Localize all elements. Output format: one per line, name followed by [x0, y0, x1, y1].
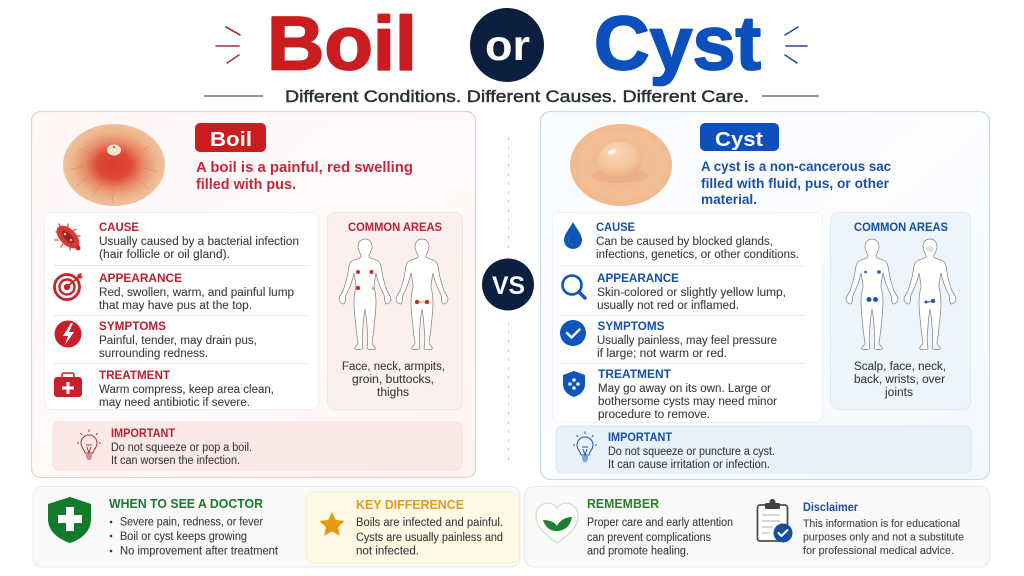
text: cause — [596, 236, 799, 261]
heading: remember: REMEMBER — [587, 497, 659, 511]
text: symptoms: if large; not warm or red. — [597, 348, 727, 360]
text: treatment: may need antibiotic if severe. — [99, 397, 250, 409]
caption: common areas — [342, 361, 445, 399]
text: treatment: May go away on its own. Large or — [598, 383, 771, 395]
bottom bar right — [524, 486, 990, 567]
cyst details card — [552, 212, 822, 422]
boil common areas panel — [328, 212, 462, 410]
cyst definition — [701, 159, 891, 207]
heading: cause: CAUSE — [99, 222, 139, 234]
text: remember: can prevent complications — [587, 532, 711, 544]
text: important — [111, 442, 252, 467]
icon: clipboard with check — [758, 499, 792, 542]
text: cause: infections, genetics, or other conditions. — [596, 249, 799, 261]
caption: common areas: thighs — [377, 387, 409, 399]
icon: target — [54, 273, 83, 300]
text: important: Do not squeeze or pop a boil. — [111, 442, 252, 454]
text: symptoms — [99, 335, 257, 360]
text: cause: Can be caused by blocked glands, — [596, 236, 773, 248]
list: when to see a doctor: No improvement after treatment — [120, 546, 279, 558]
text: treatment: bothersome cysts may need minor — [598, 396, 777, 408]
panel: cyst — [540, 112, 990, 480]
list: when to see a doctor: Boil or cyst keeps growing — [120, 531, 247, 543]
text: cause: Usually caused by a bacterial infection — [99, 236, 299, 248]
cyst common areas panel — [830, 212, 970, 410]
illustration: boil on skin — [63, 124, 165, 206]
text: remember: Proper care and early attention — [587, 517, 733, 529]
cyst label: Cyst — [715, 129, 763, 151]
text: important — [608, 446, 775, 471]
text: symptoms: Painful, tender, may drain pus, — [99, 335, 257, 347]
boil definition: filled with pus. — [196, 177, 296, 193]
icon: first aid kit — [54, 373, 82, 397]
icon: bacterium — [52, 221, 84, 253]
text: appearance: Skin-colored or slightly yellow lump, — [597, 287, 786, 299]
text: remember — [587, 517, 733, 558]
text: key difference: Cysts are usually painless and — [356, 532, 503, 544]
cyst definition: material. — [701, 192, 757, 207]
diagram: body back with boil spots — [396, 239, 448, 350]
boil important callout — [53, 422, 462, 470]
heading: important: IMPORTANT — [608, 432, 672, 444]
cyst label — [700, 123, 779, 151]
centre divider with VS badge: VS — [492, 272, 525, 300]
icon: check circle — [560, 320, 586, 346]
heading: treatment: TREATMENT — [99, 370, 170, 382]
caption: common areas — [854, 361, 946, 399]
subtitle: Different Conditions. Different Causes. Different Care. — [285, 87, 749, 106]
diagram: body front with cyst spots — [846, 239, 898, 350]
list: when to see a doctor: Severe pain, redness, or fever — [120, 516, 263, 528]
text: appearance — [597, 287, 786, 312]
rays left of title — [216, 27, 240, 63]
text: treatment — [99, 384, 274, 409]
cyst definition: A cyst is a non-cancerous sac — [701, 159, 891, 174]
text: symptoms: Usually painless, may feel pressure — [597, 335, 777, 347]
heading: cause: CAUSE — [596, 222, 635, 234]
text: important: It can cause irritation or infection. — [608, 459, 770, 471]
text: treatment: Warm compress, keep area clean, — [99, 384, 274, 396]
cyst definition: filled with fluid, pus, or other — [701, 176, 890, 191]
caption: common areas: back, wrists, over — [854, 374, 945, 386]
caption: common areas: Scalp, face, neck, — [854, 361, 946, 373]
title word: Boil: Boil — [267, 2, 417, 86]
icon: magnifying glass — [562, 276, 585, 298]
diagram: body back with cyst spots — [904, 239, 956, 350]
icon: star — [320, 512, 344, 536]
text: important: It can worsen the infection. — [111, 455, 240, 467]
heading: appearance: APPEARANCE — [597, 273, 679, 285]
caption: common areas: Face, neck, armpits, — [342, 361, 445, 373]
text: symptoms: surrounding redness. — [99, 348, 208, 360]
icon: light bulb — [77, 430, 101, 459]
text: appearance — [99, 287, 294, 312]
title badge: or — [470, 8, 544, 82]
text: cause — [99, 236, 299, 261]
title badge: or: or — [485, 22, 530, 70]
icon: water drop — [564, 222, 582, 249]
rays right of title — [785, 27, 807, 63]
boil label — [195, 123, 266, 152]
heading: appearance: APPEARANCE — [99, 273, 182, 285]
heading: important: IMPORTANT — [111, 428, 175, 440]
illustration: cyst on skin — [570, 124, 672, 206]
text: appearance: that may have pus at the top. — [99, 300, 252, 312]
title word: Cyst: Cyst — [594, 2, 761, 86]
heading: common areas: COMMON AREAS — [348, 222, 442, 234]
panel: key difference — [306, 492, 519, 563]
heading: treatment: TREATMENT — [598, 369, 671, 381]
text: cause: (hair follicle or oil gland). — [99, 249, 230, 261]
text: disclaimer: for professional medical advice. — [803, 545, 954, 557]
icon: green medical shield — [48, 497, 91, 543]
diagram: body front with boil spots — [339, 239, 391, 350]
heading: symptoms: SYMPTOMS — [99, 321, 166, 333]
panel: boil — [32, 112, 476, 478]
icon: lightning bolt — [54, 320, 82, 348]
bottom bar left — [33, 486, 520, 567]
cyst important callout — [556, 426, 971, 473]
boil details card — [44, 212, 318, 410]
text: treatment: procedure to remove. — [598, 409, 710, 421]
boil definition — [196, 160, 413, 193]
icon: shield — [563, 371, 585, 397]
text: disclaimer: purposes only and not a substitute — [803, 532, 964, 544]
centre divider with VS badge — [482, 137, 534, 462]
text: key difference: Boils are infected and painful. — [356, 517, 503, 529]
heading: disclaimer: Disclaimer — [803, 502, 858, 514]
heading: when to see a doctor: WHEN TO SEE A DOCTOR — [109, 497, 263, 511]
boil definition: A boil is a painful, red swelling — [196, 160, 413, 176]
text: appearance: Red, swollen, warm, and painful lump — [99, 287, 294, 299]
text: key difference — [356, 517, 503, 558]
title — [216, 2, 807, 86]
text: remember: and promote healing. — [587, 546, 689, 558]
list: when to see a doctor — [110, 516, 279, 558]
caption: common areas: groin, buttocks, — [352, 374, 434, 386]
heading: symptoms: SYMPTOMS — [598, 321, 665, 333]
text: disclaimer — [803, 518, 964, 557]
icon: light bulb — [573, 432, 597, 461]
text: disclaimer: This information is for educational — [803, 518, 960, 530]
text: treatment — [598, 383, 777, 421]
text: important: Do not squeeze or puncture a cyst. — [608, 446, 775, 458]
heading: common areas: COMMON AREAS — [854, 222, 948, 234]
text: symptoms — [597, 335, 777, 360]
boil label: Boil — [210, 129, 252, 151]
caption: common areas: joints — [884, 387, 913, 399]
text: key difference: not infected. — [356, 546, 419, 558]
icon: heart with leaves — [536, 503, 578, 543]
text: appearance: usually not red or inflamed. — [597, 300, 739, 312]
heading: key difference: KEY DIFFERENCE — [356, 498, 464, 512]
